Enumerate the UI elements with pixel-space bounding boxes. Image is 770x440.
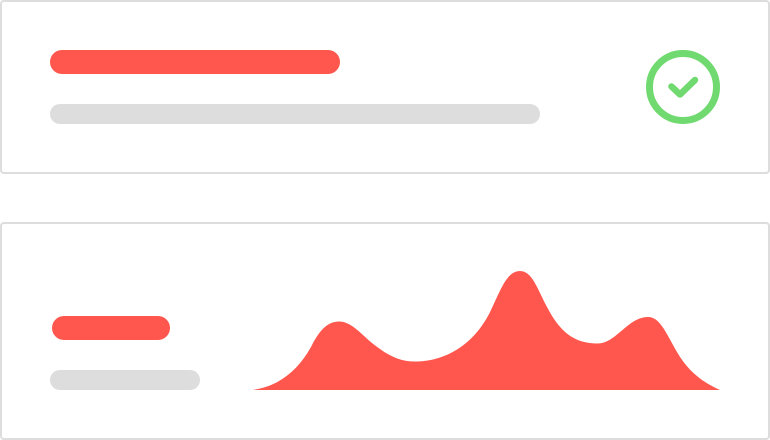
red label bar bbox=[52, 316, 170, 340]
grey subtitle bar bbox=[50, 104, 540, 124]
card outline: top bbox=[1, 1, 769, 173]
red title bar bbox=[50, 50, 340, 74]
icon: green check circle bbox=[650, 54, 716, 120]
grey label bar bbox=[50, 370, 200, 390]
panel: bottom chart card bbox=[1, 223, 769, 439]
card outline: bottom bbox=[1, 223, 769, 439]
panel: top status card bbox=[1, 1, 769, 173]
area chart bbox=[252, 271, 720, 390]
